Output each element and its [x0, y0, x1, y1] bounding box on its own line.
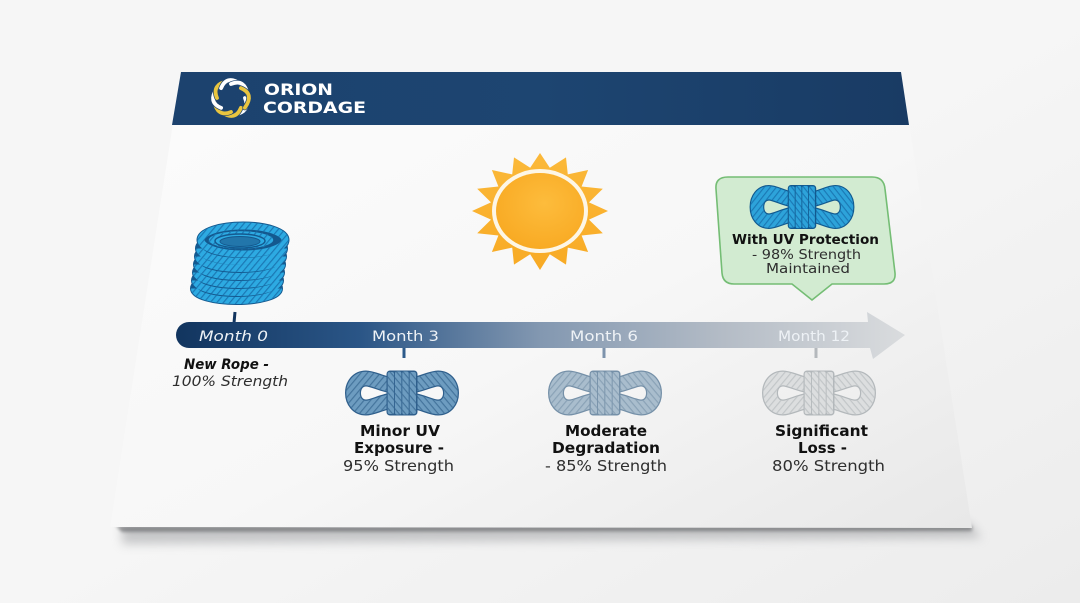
- icon: Orion Cordage logo: [208, 75, 254, 121]
- logo wordmark: ORION: [264, 80, 333, 99]
- month 3 text: Exposure -: [354, 439, 444, 457]
- month 12 text: Significant: [775, 422, 869, 440]
- month 12 text: [772, 422, 885, 475]
- month 6 text: Moderate: [565, 422, 647, 440]
- stage: new rope: [172, 357, 288, 390]
- timeline labels: Month 6: [570, 329, 638, 345]
- timeline arrow: [176, 312, 905, 359]
- month 6 text: [545, 422, 667, 475]
- month 3 text: [343, 422, 454, 475]
- stage: new rope: 100% Strength: [172, 374, 288, 390]
- panel: card: [110, 72, 972, 528]
- tick marks: [234, 312, 816, 358]
- callout text: - 98% Strength: [752, 247, 861, 263]
- stage: month 6: [545, 370, 667, 475]
- month 3 text: 95% Strength: [343, 457, 454, 475]
- header band: [172, 72, 909, 125]
- icon: new rope coil: [194, 226, 285, 300]
- card shadow: [116, 522, 982, 544]
- stage: month 3: [343, 370, 454, 475]
- month 6 text: - 85% Strength: [545, 457, 667, 475]
- timeline labels: Month 12: [778, 329, 850, 345]
- timeline labels: [199, 329, 850, 345]
- timeline labels: Month 3: [372, 329, 439, 345]
- callout text: Maintained: [766, 261, 850, 277]
- timeline labels: Month 0: [199, 329, 268, 345]
- icon: rope month 12: [770, 370, 868, 416]
- icon: protected rope: [757, 185, 847, 229]
- stage: month 12: [770, 370, 885, 475]
- month 12 text: 80% Strength: [772, 457, 885, 475]
- callout text: [732, 232, 879, 277]
- stage: new rope: New Rope -: [184, 357, 269, 373]
- logo wordmark: CORDAGE: [263, 98, 366, 117]
- month 6 text: Degradation: [552, 439, 660, 457]
- month 12 text: Loss -: [798, 439, 847, 457]
- logo wordmark: [263, 80, 366, 117]
- callout: with UV protection: [716, 177, 895, 300]
- icon: rope month 6: [556, 370, 654, 416]
- icon: sun: [472, 153, 608, 270]
- icon: rope month 3: [353, 370, 451, 416]
- month 3 text: Minor UV: [360, 422, 440, 440]
- callout text: With UV Protection: [732, 232, 879, 248]
